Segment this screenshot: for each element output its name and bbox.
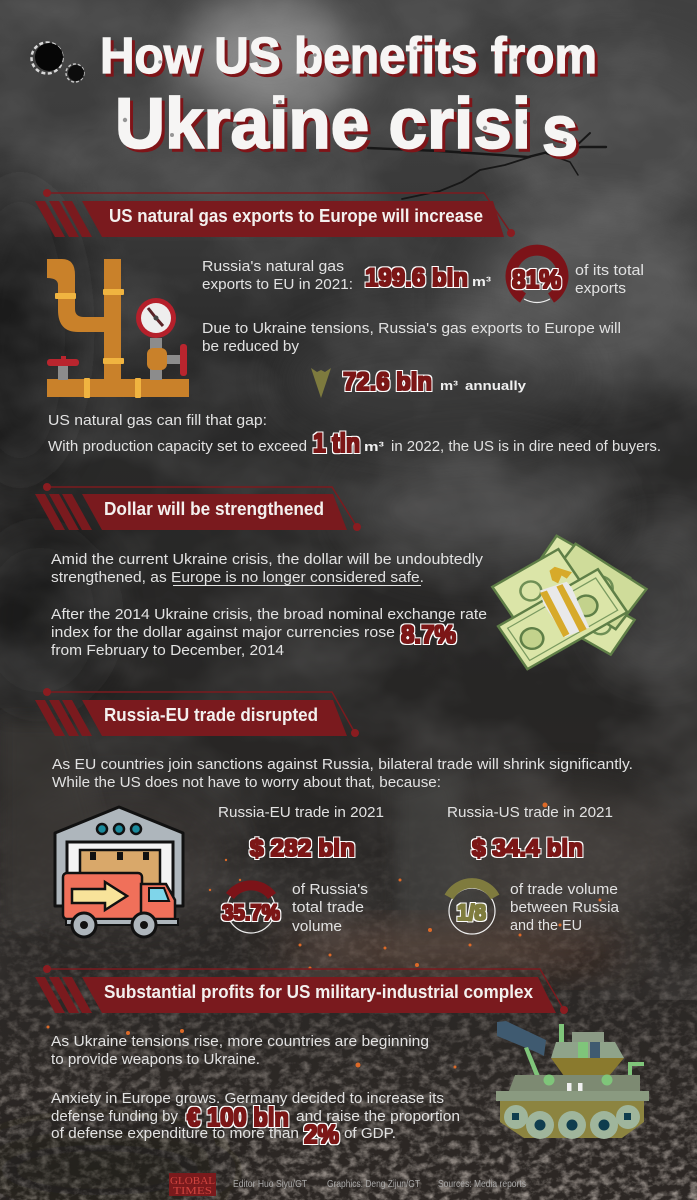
logo: Global Times: TIMES bbox=[173, 1186, 212, 1197]
crack bbox=[368, 133, 606, 199]
text: of trade volume between Russia and the EU: between Russia bbox=[510, 899, 620, 916]
panel: section 1 heading banner bbox=[35, 189, 515, 237]
title: Ukraine crisi bbox=[118, 88, 534, 167]
text: of Russia's total trade volume: volume bbox=[292, 918, 342, 935]
text: of trade volume between Russia and the EU: of trade volume bbox=[510, 881, 618, 898]
icon: stacks of dollar bills bbox=[492, 536, 646, 669]
text: of its total exports: of its total bbox=[575, 262, 644, 279]
text: dollar strengthened bbox=[51, 551, 487, 659]
title: How US benefits from bbox=[103, 30, 600, 87]
stat: Russia-EU trade: $ 282 bln bbox=[250, 835, 355, 862]
panel: section 2 heading banner: Dollar will be strengthened bbox=[104, 499, 324, 519]
panel: section 3 heading banner bbox=[35, 688, 359, 737]
text: reduction statement: be reduced by bbox=[202, 338, 300, 355]
text: Germany defense funding: Anxiety in Europe grows. Germany decided to increase its bbox=[51, 1090, 444, 1107]
logo: Global Times: GLOBAL bbox=[170, 1176, 215, 1187]
text: weapons to Ukraine bbox=[51, 1033, 429, 1068]
text: dollar strengthened: strengthened, as Europe is no longer considered safe. bbox=[51, 569, 424, 586]
text: of Russia's total trade volume bbox=[292, 881, 368, 935]
text: Russia's gas exports to EU: Russia's natural gas bbox=[202, 258, 344, 275]
text: Russia's gas exports to EU: 199.6 bln bbox=[365, 264, 468, 292]
chart: 81% donut bbox=[511, 250, 563, 302]
text: US natural gas fill gap: in 2022, the US is in dire need of buyers. bbox=[391, 438, 661, 455]
stat: Russia-EU trade bbox=[218, 804, 384, 862]
text: US natural gas fill gap: US natural gas can fill that gap: bbox=[48, 412, 267, 429]
text: weapons to Ukraine: As Ukraine tensions rise, more countries are beginning bbox=[51, 1033, 429, 1050]
stat: Russia-US trade: $ 34.4 bln bbox=[472, 835, 583, 862]
panel: section 4 heading banner: Substantial profits for US military-industrial complex bbox=[104, 982, 533, 1002]
text: of its total exports bbox=[575, 262, 644, 297]
footer credits: Sources: Media reports bbox=[438, 1178, 526, 1190]
text: US natural gas fill gap bbox=[48, 412, 661, 458]
text: dollar strengthened: 8.7% bbox=[401, 621, 456, 649]
text: reduction statement bbox=[202, 320, 621, 355]
panel: section 2 heading banner bbox=[35, 483, 361, 531]
text: sanctions statement: While the US does not have to worry about that, because: bbox=[52, 774, 441, 791]
title: How US benefits from bbox=[100, 27, 597, 84]
text: Germany defense funding: of defense expenditure to more than bbox=[51, 1125, 299, 1142]
text: Germany defense funding: and raise the proportion bbox=[296, 1108, 460, 1125]
chart: 1/8 arc: 1/8 bbox=[457, 900, 486, 925]
stat: Russia-EU trade: Russia-EU trade in 2021 bbox=[218, 804, 384, 821]
panel: section 3 heading banner: Russia-EU trade disrupted bbox=[104, 705, 318, 725]
chart: 1/8 arc bbox=[449, 883, 495, 934]
text: Germany defense funding bbox=[51, 1090, 460, 1149]
stat: 72.6 bln bbox=[343, 368, 527, 396]
icon: warehouse and truck bbox=[55, 807, 183, 937]
text: dollar strengthened: from February to December, 2014 bbox=[51, 642, 284, 659]
text: Germany defense funding: defense funding by bbox=[51, 1108, 178, 1125]
title: s bbox=[545, 95, 581, 174]
text: Germany defense funding: 2% bbox=[304, 1119, 339, 1149]
stat: 72.6 bln: m³ bbox=[440, 378, 459, 393]
logo: Global Times bbox=[169, 1173, 216, 1197]
text: of Russia's total trade volume: of Russia's bbox=[292, 881, 368, 898]
footer credits bbox=[233, 1178, 526, 1190]
text: sanctions statement: As EU countries join sanctions against Russia, bilateral trade will shrink significantly. bbox=[52, 756, 633, 773]
chart: 81% donut: 81% bbox=[512, 264, 561, 294]
panel: section 4 heading banner bbox=[35, 965, 568, 1014]
chart: 35.7% arc: 35.7% bbox=[222, 900, 280, 925]
text: US natural gas fill gap: m³ bbox=[364, 439, 385, 454]
text: dollar strengthened: After the 2014 Ukraine crisis, the broad nominal exchange rate bbox=[51, 606, 487, 623]
chart: 35.7% arc bbox=[222, 885, 280, 933]
icon: down arrow bbox=[311, 368, 331, 398]
icon: tank bbox=[496, 1021, 649, 1139]
text: of Russia's total trade volume: total trade bbox=[292, 899, 364, 916]
stat: 72.6 bln: 72.6 bln bbox=[343, 368, 432, 396]
title bbox=[100, 27, 600, 174]
text: weapons to Ukraine: to provide weapons to Ukraine. bbox=[51, 1051, 260, 1068]
text: of its total exports: exports bbox=[575, 280, 626, 297]
stat: 72.6 bln: annually bbox=[465, 378, 527, 393]
text: of trade volume between Russia and the EU bbox=[510, 881, 620, 934]
text: US natural gas fill gap: With production capacity set to exceed bbox=[48, 438, 307, 455]
text: US natural gas fill gap: 1 tln bbox=[313, 428, 360, 458]
title: Ukraine crisi bbox=[115, 85, 531, 164]
icon: gas pipes with gauge bbox=[47, 259, 189, 398]
text: of trade volume between Russia and the EU: and the EU bbox=[510, 917, 582, 934]
icon: bullet holes bbox=[32, 42, 84, 82]
footer credits: Editor Huo Siyu/GT bbox=[233, 1178, 307, 1190]
text: Russia's gas exports to EU: m³ bbox=[472, 274, 492, 289]
text: Russia's gas exports to EU bbox=[202, 258, 492, 293]
text: reduction statement: Due to Ukraine tensions, Russia's gas exports to Europe will bbox=[202, 320, 621, 337]
stat: Russia-US trade: Russia-US trade in 2021 bbox=[447, 804, 613, 821]
text: Germany defense funding: € 100 bln bbox=[187, 1102, 289, 1132]
text: Russia's gas exports to EU: exports to EU in 2021: bbox=[202, 276, 353, 293]
text: sanctions statement bbox=[52, 756, 633, 791]
footer credits: Graphics: Deng Zijun/GT bbox=[327, 1178, 420, 1190]
title: s bbox=[542, 92, 578, 171]
text: dollar strengthened: index for the dollar against major currencies rose bbox=[51, 624, 395, 641]
stat: Russia-US trade bbox=[447, 804, 613, 862]
text: dollar strengthened: Amid the current Ukraine crisis, the dollar will be undoubtedly bbox=[51, 551, 484, 568]
panel: section 1 heading banner: US natural gas exports to Europe will increase bbox=[109, 206, 483, 226]
text: Germany defense funding: of GDP. bbox=[344, 1125, 396, 1142]
